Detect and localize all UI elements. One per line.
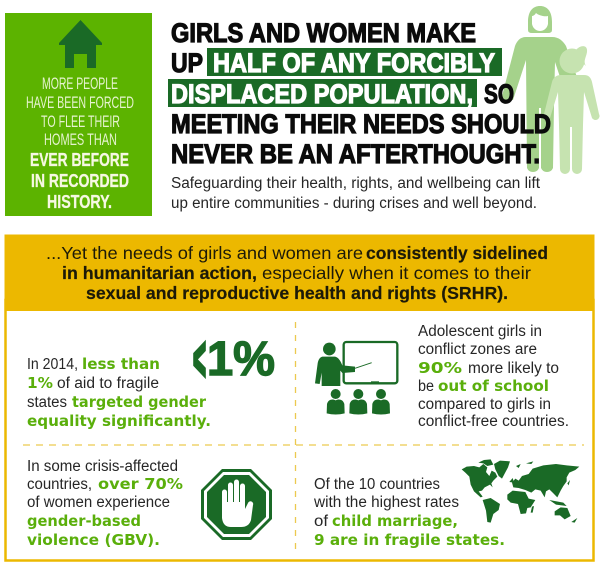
- statistic: gender-based violence: of women experience: [27, 494, 170, 511]
- subheading text: Safeguarding their health, rights, and wellbeing can lift: [171, 175, 541, 192]
- banner: sidelined needs: sexual and reproductive health and rights (SRHR).: [86, 283, 508, 303]
- statistic: out of school: out of school: [438, 377, 549, 395]
- icon: classroom: [315, 342, 397, 414]
- statistic: out of school: conflict zones are: [418, 341, 537, 358]
- statistic: child marriage: child marriage,: [332, 512, 458, 530]
- statistic: gender-based violence: [27, 458, 183, 549]
- highlight: half of any forcibly: [207, 48, 502, 76]
- heading: HALF OF ANY FORCIBLY: [213, 48, 495, 78]
- statistic: child marriage: of: [314, 513, 329, 530]
- big number: less than 1 percent: <: [193, 325, 206, 394]
- heading: SO: [484, 79, 514, 109]
- heading: MEETING THEIR NEEDS SHOULD: [171, 109, 551, 139]
- statistic: out of school: Adolescent girls in: [418, 323, 542, 340]
- statistic: child marriage: with the highest rates: [313, 494, 459, 511]
- panel: frame for statistics: [6, 300, 594, 560]
- statistic: aid to fragile states: states: [27, 394, 67, 411]
- heading: GIRLS AND WOMEN MAKE: [171, 18, 476, 48]
- statistic: aid to fragile states: less than: [82, 355, 160, 373]
- icon: house: [59, 20, 102, 68]
- icon: girl figure: [543, 46, 600, 174]
- big number: less than 1 percent: [193, 325, 275, 394]
- panel: displacement callout: [5, 13, 152, 216]
- icon: world map: [462, 459, 579, 523]
- statistic: gender-based violence: gender-based: [27, 512, 141, 530]
- callout text: [26, 74, 134, 212]
- callout text: MORE PEOPLE: [42, 74, 118, 93]
- callout text: IN RECORDED: [31, 171, 129, 191]
- callout text: HAVE BEEN FORCED: [26, 93, 134, 112]
- banner: sidelined needs: [4, 234, 594, 311]
- subheading text: [171, 175, 541, 212]
- statistic: child marriage: [313, 476, 505, 549]
- statistic: gender-based violence: violence (GBV).: [27, 531, 160, 549]
- icon: stop hand: [201, 469, 272, 540]
- statistic: out of school: be: [418, 378, 434, 395]
- statistic: aid to fragile states: of aid to fragile: [57, 375, 159, 392]
- banner: sidelined needs: especially when it comes to their: [262, 263, 531, 283]
- statistic: aid to fragile states: 1%: [27, 374, 53, 392]
- statistic: out of school: conflict-free countries.: [418, 413, 569, 430]
- statistic: out of school: 90%: [418, 359, 462, 377]
- subheading text: up entire communities - during crises and well beyond.: [171, 195, 537, 212]
- heading: DISPLACED POPULATION,: [171, 79, 473, 109]
- statistic: child marriage: Of the 10 countries: [314, 476, 440, 493]
- statistic: aid to fragile states: equality significantly.: [27, 412, 211, 430]
- highlight: displaced population: [168, 79, 477, 107]
- statistic: gender-based violence: over 70%: [98, 475, 183, 493]
- callout text: HOMES THAN: [44, 130, 117, 149]
- statistic: out of school: more likely to: [468, 360, 559, 377]
- heading: NEVER BE AN AFTERTHOUGHT.: [171, 139, 540, 169]
- statistic: out of school: compared to girls in: [418, 396, 551, 413]
- callout text: TO FLEE THEIR: [41, 112, 120, 131]
- statistic: gender-based violence: In some crisis-affected: [27, 458, 178, 475]
- banner: sidelined needs: ...Yet the needs of girls and women are: [46, 243, 363, 263]
- icon: woman figure: [501, 6, 578, 172]
- statistic: out of school: [418, 323, 569, 430]
- statistic: child marriage: 9 are in fragile states.: [314, 531, 505, 549]
- heading: [168, 18, 551, 169]
- statistic: aid to fragile states: [27, 355, 211, 430]
- statistic: aid to fragile states: In 2014,: [27, 356, 78, 373]
- heading: UP: [171, 48, 203, 78]
- banner: sidelined needs: consistently sidelined: [366, 243, 548, 263]
- statistic: gender-based violence: countries,: [27, 476, 92, 493]
- callout text: EVER BEFORE: [30, 150, 129, 170]
- banner: sidelined needs: in humanitarian action,: [62, 263, 257, 283]
- callout text: HISTORY.: [47, 192, 112, 212]
- big number: less than 1 percent: 1%: [207, 333, 275, 386]
- statistic: aid to fragile states: targeted gender: [72, 393, 207, 411]
